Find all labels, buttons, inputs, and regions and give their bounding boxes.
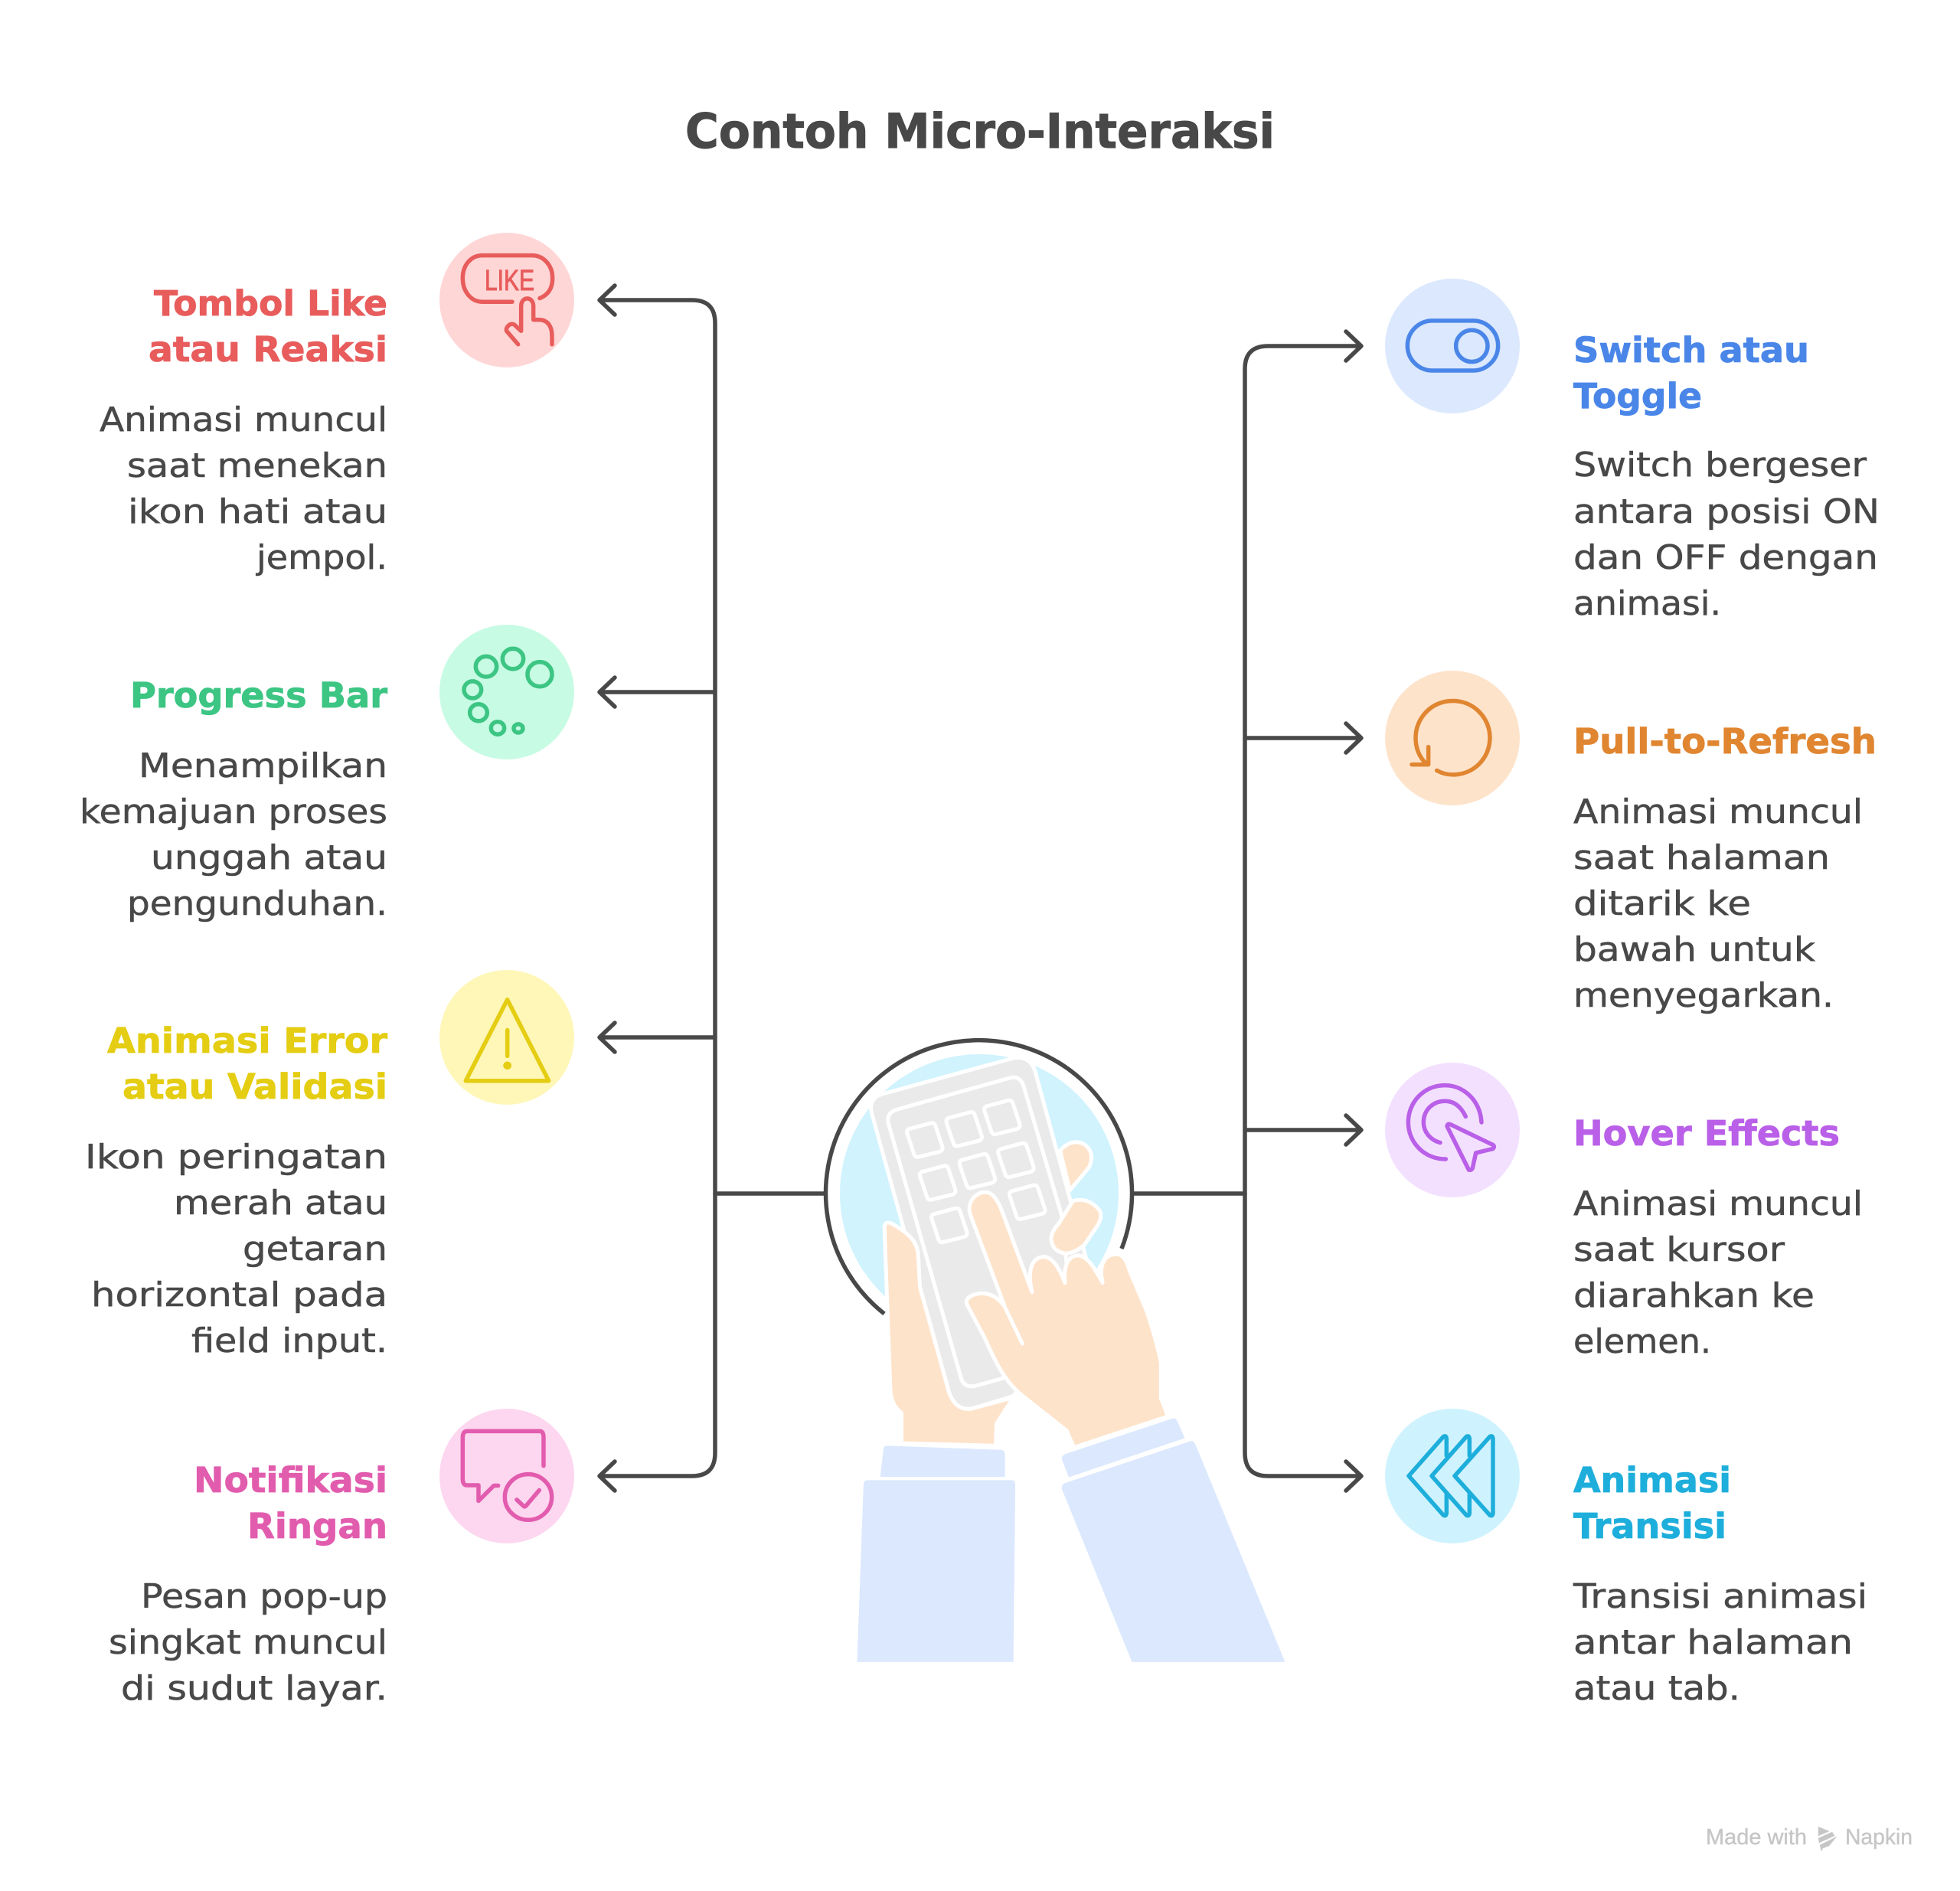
description: Tombol Like: ikon hati atau <box>128 492 387 531</box>
description: Animasi Error: getaran <box>243 1230 387 1269</box>
description: Switch atau Toggle: antara posisi ON <box>1573 492 1880 531</box>
heading: Hover Effects: Hover Effects <box>1573 1113 1840 1154</box>
description: Switch atau Toggle: animasi. <box>1573 584 1721 623</box>
description: Progress Bar: Menampilkan <box>139 746 387 785</box>
description: Switch atau Toggle: Switch bergeser <box>1573 446 1867 485</box>
panel: Animasi Error <box>85 970 574 1360</box>
watermark: Made with Napkin: Napkin <box>1845 1825 1913 1850</box>
icon: like button: LIKE <box>485 265 534 297</box>
description: Hover Effects: Animasi muncul <box>1573 1184 1863 1223</box>
panel: Tombol Like <box>100 233 574 577</box>
panel: Hover Effects <box>1385 1063 1863 1361</box>
description: Tombol Like <box>100 400 387 577</box>
central blue circle <box>840 1054 1119 1333</box>
heading: Tombol Like atau Reaksi: atau Reaksi <box>149 329 387 370</box>
heading: Animasi Transisi <box>1573 1460 1731 1546</box>
description: Pull-to-Refresh: menyegarkan. <box>1573 976 1834 1015</box>
description: Pull-to-Refresh <box>1573 792 1863 1015</box>
panel: Pull-to-Refresh <box>1385 671 1877 1015</box>
icon: cursor with ripples <box>1385 1063 1520 1197</box>
icon: warning triangle <box>439 970 574 1105</box>
heading: Animasi Transisi: Transisi <box>1573 1506 1726 1546</box>
description: Progress Bar: kemajuan proses <box>80 792 387 831</box>
description: Hover Effects: saat kursor <box>1573 1230 1785 1269</box>
panel: Animasi Transisi <box>1385 1409 1867 1708</box>
description: Animasi Error: merah atau <box>174 1184 387 1223</box>
description: Pull-to-Refresh: Animasi muncul <box>1573 792 1863 831</box>
description: Tombol Like: jempol. <box>256 538 387 577</box>
description: Animasi Error: field input. <box>191 1321 387 1360</box>
description: Animasi Error: Ikon peringatan <box>85 1138 387 1177</box>
heading: Notifikasi Ringan <box>194 1460 387 1546</box>
heading: Notifikasi Ringan: Notifikasi <box>194 1460 387 1501</box>
panel: Switch atau Toggle <box>1385 279 1880 623</box>
central circle outline <box>826 1040 1132 1314</box>
description: Pull-to-Refresh: saat halaman <box>1573 838 1830 877</box>
description: Progress Bar: pengunduhan. <box>127 884 387 923</box>
icon: toggle switch <box>1385 279 1520 413</box>
description: Hover Effects: diarahkan ke <box>1573 1276 1815 1315</box>
panel: Progress Bar <box>80 625 574 923</box>
description: Tombol Like: saat menekan <box>127 446 387 485</box>
heading: Animasi Error atau Validasi <box>107 1021 388 1107</box>
description: Pull-to-Refresh: bawah untuk <box>1573 930 1816 969</box>
watermark: Made with Napkin: Made with <box>1706 1825 1807 1850</box>
panel: Notifikasi Ringan <box>109 1409 574 1708</box>
heading: Switch atau Toggle: Switch atau <box>1573 330 1809 371</box>
arrows: right connector tree <box>1134 331 1361 1491</box>
heading: Progress Bar: Progress Bar <box>130 675 388 716</box>
icon: chat bubble with check <box>439 1409 574 1543</box>
description: Notifikasi Ringan: Pesan pop-up <box>141 1577 387 1616</box>
heading: Notifikasi Ringan: Ringan <box>247 1506 387 1546</box>
icon: like button <box>439 233 574 367</box>
description: Hover Effects <box>1573 1184 1863 1361</box>
description: Notifikasi Ringan <box>109 1577 387 1708</box>
description: Notifikasi Ringan: singkat muncul <box>109 1623 387 1662</box>
description: Switch atau Toggle: dan OFF dengan <box>1573 538 1878 577</box>
description: Switch atau Toggle <box>1573 446 1880 623</box>
description: Animasi Error: horizontal pada <box>91 1275 387 1315</box>
icon: triple rewind triangles <box>1385 1409 1520 1543</box>
arrows: left connector tree <box>599 286 825 1491</box>
description: Animasi Error <box>85 1138 387 1360</box>
description: Tombol Like: Animasi muncul <box>100 400 387 439</box>
description: Animasi Transisi: Transisi animasi <box>1573 1577 1867 1616</box>
title: Contoh Micro-Interaksi <box>685 103 1275 159</box>
heading: Animasi Error atau Validasi: atau Validasi <box>122 1066 387 1107</box>
description: Hover Effects: elemen. <box>1573 1322 1711 1361</box>
hands and phone drawing <box>857 1057 1285 1662</box>
description: Progress Bar <box>80 746 387 923</box>
description: Animasi Transisi: atau tab. <box>1573 1669 1740 1708</box>
heading: Tombol Like atau Reaksi: Tombol Like <box>154 283 387 324</box>
description: Progress Bar: unggah atau <box>151 838 387 877</box>
heading: Animasi Error atau Validasi: Animasi Error <box>107 1021 388 1061</box>
central illustration: hands holding a phone <box>826 1040 1285 1662</box>
description: Pull-to-Refresh: ditarik ke <box>1573 884 1751 923</box>
watermark: Made with Napkin <box>1706 1825 1913 1851</box>
description: Notifikasi Ringan: di sudut layar. <box>121 1669 387 1708</box>
description: Animasi Transisi: antar halaman <box>1573 1623 1853 1662</box>
heading: Tombol Like atau Reaksi <box>149 283 387 370</box>
icon: refresh arrow <box>1385 671 1520 805</box>
heading: Switch atau Toggle: Toggle <box>1573 376 1702 416</box>
heading: Switch atau Toggle <box>1573 330 1809 416</box>
heading: Animasi Transisi: Animasi <box>1573 1460 1731 1501</box>
description: Animasi Transisi <box>1573 1577 1867 1708</box>
heading: Pull-to-Refresh: Pull-to-Refresh <box>1573 721 1877 762</box>
icon: loading circles <box>439 625 574 759</box>
